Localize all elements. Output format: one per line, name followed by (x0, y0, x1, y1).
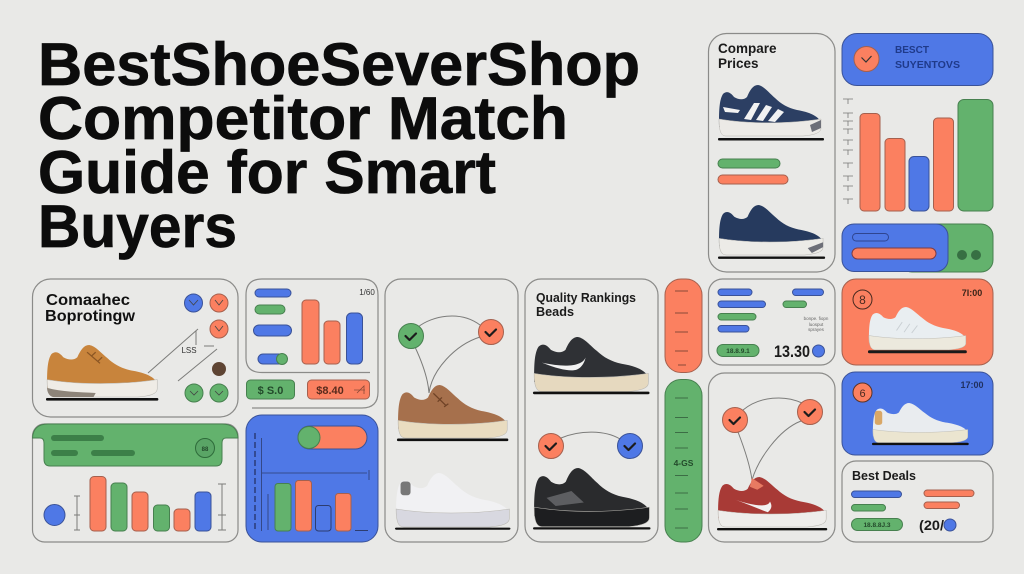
label: time: 1/60 (359, 288, 375, 297)
heading: Boprotingw (45, 308, 136, 325)
icon: orange check right (798, 400, 822, 424)
connector curve (561, 432, 620, 439)
banner badge (196, 438, 214, 458)
icon: orange check left (722, 408, 748, 432)
heading: Comaahec (46, 292, 130, 309)
banner badge: 88 (202, 447, 209, 453)
small note (804, 316, 829, 332)
bars (275, 484, 291, 531)
price pill: 18.8.9.1 (726, 348, 750, 355)
icon: green check (398, 324, 424, 348)
blue dot (812, 345, 824, 357)
bar: orange price (718, 175, 788, 184)
bar chart: top right (843, 99, 993, 211)
shoe: white on blue (872, 403, 969, 445)
vertical caption (254, 433, 256, 531)
bar chart (90, 476, 106, 531)
heading: compare prices: Prices (718, 56, 759, 71)
header text (895, 45, 960, 71)
dots (957, 250, 981, 260)
panel: price list (708, 279, 835, 365)
icon: orange check badge (854, 46, 879, 72)
panel: blue and green toggle card (842, 224, 993, 272)
title: Buyers (38, 193, 237, 260)
gauge: green (665, 380, 702, 542)
toggle bars (852, 234, 888, 241)
gauge: orange (665, 279, 702, 372)
panel: compare prices (708, 34, 835, 272)
shoe: white (395, 473, 510, 530)
badge (853, 383, 872, 402)
badge: 6 (859, 388, 866, 400)
shoe: red (717, 477, 827, 530)
title: Competitor Match (38, 85, 568, 152)
legend bars (255, 289, 291, 297)
axes (262, 438, 369, 531)
icon: orange check (538, 434, 564, 458)
price tag orange: $8.40 (316, 385, 344, 397)
badge: 8 (859, 293, 866, 307)
panel: red shoe (708, 373, 835, 542)
badge (853, 290, 872, 309)
panel: best survey header (842, 34, 993, 86)
mini bars (302, 300, 319, 364)
price tag green: $ S.0 (258, 385, 283, 397)
icon: check badges (184, 294, 228, 402)
connector curves (738, 398, 802, 480)
shoe: tan (46, 345, 158, 401)
heading (536, 290, 636, 319)
panel: green header chart (32, 424, 238, 542)
shoe: navy striped (718, 85, 824, 140)
connector lines (148, 329, 217, 381)
panel: blue card (842, 372, 993, 455)
gauge label: 4-GS (674, 458, 694, 468)
panel: comparison with orange shoe (32, 279, 238, 417)
price value: (20/ (919, 517, 944, 533)
shoe: navy plain (718, 205, 825, 259)
panel: blue chart (246, 415, 378, 542)
heading: Best Deals (852, 469, 916, 483)
title (38, 31, 640, 260)
banner bars (51, 435, 135, 456)
small note: luosput (809, 322, 824, 327)
blue dot (944, 519, 956, 531)
shoe: black with white swoosh (533, 337, 649, 394)
small note: bonpe. fiopn (804, 316, 829, 321)
deal bars (852, 491, 902, 498)
panel: best deals (842, 461, 993, 542)
axis left (74, 484, 226, 530)
toggle (298, 426, 367, 449)
time: 7I:00 (962, 288, 982, 298)
header text: SUYENTOVS (895, 60, 960, 71)
heading (45, 292, 136, 325)
heading: Quality Rankings (536, 290, 636, 305)
shoe: black chunky (533, 468, 651, 530)
axis ticks (843, 99, 853, 204)
heading: compare prices (718, 41, 777, 71)
price pill (852, 518, 902, 530)
panel: brown and white shoes (385, 279, 518, 542)
price pill: 18.8.8J.3 (863, 522, 891, 529)
heading: Beads (536, 304, 574, 319)
title: BestShoeSeverShop (38, 31, 640, 98)
shoe: white on orange (868, 307, 967, 353)
panel: quality rankings (525, 279, 658, 542)
time: 17:00 (960, 380, 984, 390)
bar: green price (718, 159, 780, 168)
connector curves (415, 316, 480, 393)
list bars (718, 289, 752, 296)
header text: BESCT (895, 45, 929, 56)
panel: price mini chart (246, 279, 378, 408)
blue dot (44, 504, 65, 526)
green banner (32, 424, 238, 466)
icon: blue check (618, 434, 642, 458)
icon: orange check (478, 320, 504, 344)
panel: orange card (842, 279, 993, 365)
small note: sprayes (808, 327, 825, 332)
price value: 13.30 (774, 342, 810, 361)
label: LSS (181, 346, 197, 355)
shoe: brown (397, 385, 508, 441)
title: Guide for Smart (38, 139, 496, 206)
heading: compare prices: Compare (718, 41, 777, 56)
